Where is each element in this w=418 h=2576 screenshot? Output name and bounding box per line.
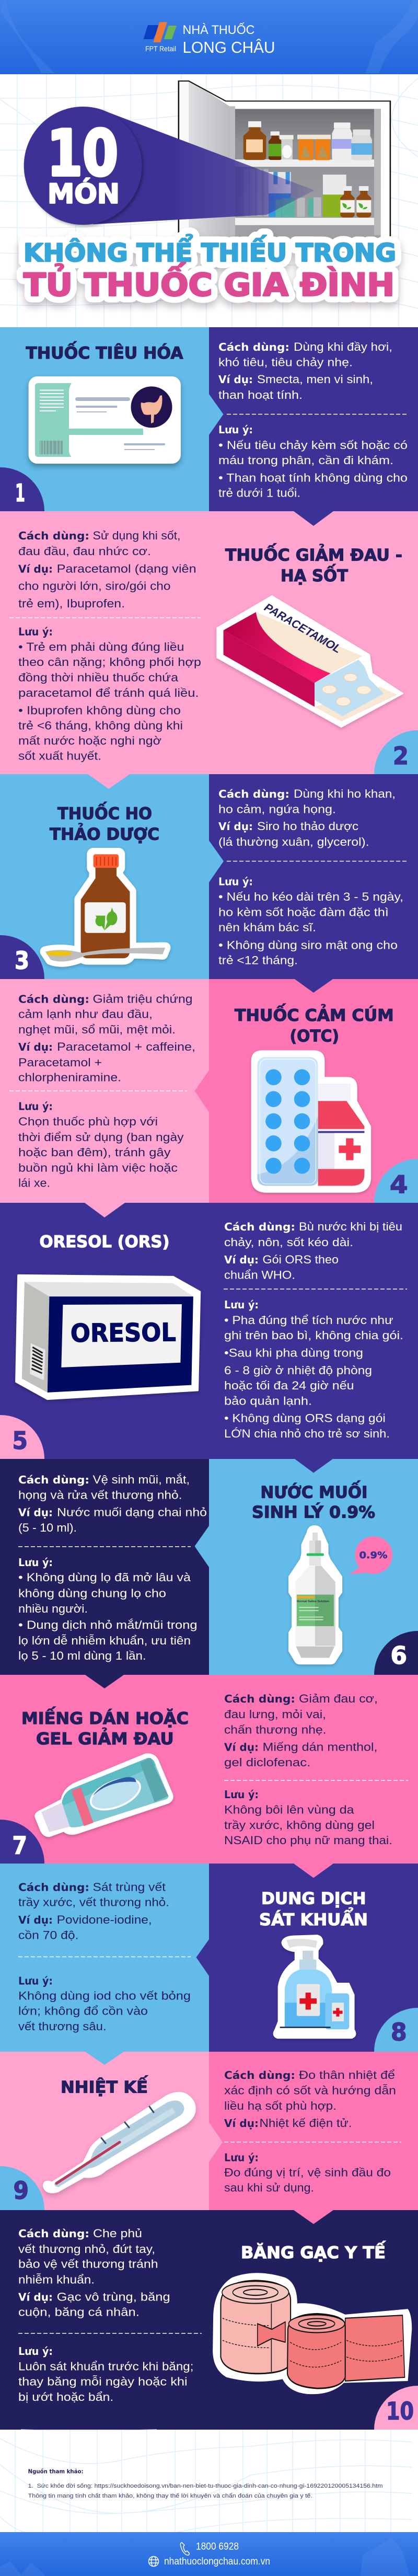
badge: number 2: 2 — [393, 742, 409, 770]
badge: number 4: 4 — [390, 1170, 408, 1199]
text: usage and notes: Ví dụ: — [218, 373, 253, 386]
illustration: oresol box — [16, 1275, 200, 1399]
references text: 1. Sức khỏe đời sống: https://suckhoedoisong.vn/ban-nen-biet-tu-thuoc-gia-dinh-can-co-nhung-gi-169220120005134156.htm — [28, 2483, 383, 2489]
panel: 9 nhiệt kế — [0, 2052, 418, 2210]
text: usage and notes: Cách dùng: — [224, 1693, 295, 1705]
text: usage and notes — [9, 992, 195, 1190]
badge: number 5 — [0, 1415, 44, 1459]
text: usage and notes: Ví dụ: — [224, 1254, 259, 1266]
text: usage and notes: paracetamol để tránh quá liều. — [18, 686, 199, 699]
text: usage and notes: • Không dùng lọ đã mở lâu và — [18, 1571, 191, 1584]
text: usage and notes: chảy, nôn, sốt kéo dài. — [224, 1236, 353, 1249]
text: usage and notes: xác định có sốt và hướng dẫn — [224, 2084, 396, 2097]
text: usage and notes: lái xe. — [18, 1176, 50, 1190]
text: usage and notes: nên khám bác sĩ. — [218, 921, 316, 934]
text: usage and notes: Đo đúng vị trí, vệ sinh đầu đo — [224, 2166, 391, 2179]
illustration: bandage rolls — [213, 2273, 412, 2394]
text: usage and notes — [224, 1220, 407, 1440]
heading: (OTC) — [290, 1027, 339, 1045]
text: usage and notes: nghẹt mũi, sổ mũi, mệt mỏi. — [18, 1023, 176, 1036]
text: usage and notes: Lưu ý: — [18, 1100, 53, 1113]
text: usage and notes: Lưu ý: — [224, 2152, 259, 2164]
panel: 2 thuốc giảm đau hạ sốt — [0, 511, 418, 774]
text: usage and notes: than hoạt tính. — [218, 388, 303, 401]
references text — [28, 2483, 383, 2499]
illustration: antiseptic pump bottles — [273, 1935, 356, 2039]
text: usage and notes: Không dùng iod cho vết bỏng — [18, 1990, 191, 2002]
text: usage and notes: Dùng khi ho khan, — [294, 787, 396, 800]
text: usage and notes: nhiễm khuẩn. — [18, 2273, 95, 2286]
text: usage and notes: Paracetamol + caffeine, — [57, 1040, 195, 1053]
text: usage and notes: gel diclofenac. — [224, 1756, 310, 1769]
panel: 5 oresol: ORESOL — [71, 1318, 176, 1348]
heading: ORESOL (ORS) — [40, 1233, 169, 1251]
text: usage and notes: chlorpheniramine. — [18, 1071, 121, 1084]
text: usage and notes: theo cân nặng; không phối hợp — [18, 656, 201, 669]
panel: 6 nước muối sinh lý — [0, 1459, 418, 1675]
text: usage and notes: chấn thương nhẹ. — [224, 1723, 326, 1736]
references heading: Nguồn tham khảo: — [28, 2468, 84, 2475]
text: usage and notes: cho người lớn, siro/gói cho — [18, 580, 170, 593]
text: usage and notes: • Ibuprofen không dùng cho — [18, 704, 181, 717]
shelves and medicines — [230, 106, 380, 235]
badge: number 9: 9 — [14, 2177, 29, 2205]
text: usage and notes: Che phủ — [93, 2227, 142, 2240]
text: usage and notes: đồng thời nhiều thuốc chứa — [18, 671, 179, 684]
heading: THẢO DƯỢC — [50, 824, 159, 844]
text: usage and notes: mất nước hoặc nghi ngờ — [18, 734, 161, 748]
illustration: gel tube — [36, 1754, 172, 1836]
text: usage and notes: Paracetamol (dạng viên — [57, 562, 196, 575]
text: usage and notes: cảm lạnh như đau đầu, — [18, 1008, 153, 1020]
badge: number 3: 3 — [15, 947, 29, 975]
text: usage and notes: ho kèm sốt hoặc đàm đặc thì — [218, 906, 389, 919]
badge: number 7: 7 — [13, 1832, 27, 1860]
logo wordmark: LONG CHÂU — [183, 38, 275, 56]
badge: number 10 — [374, 2386, 418, 2430]
logo: FPT Retail: FPT Retail — [145, 44, 176, 53]
heading — [225, 544, 402, 585]
text: usage and notes: Cách dùng: — [18, 1474, 89, 1486]
icon: globe — [148, 2556, 159, 2567]
text: usage and notes: Lưu ý: — [218, 423, 253, 436]
heading: NƯỚC MUỐI — [260, 1480, 368, 1502]
text: usage and notes: (lá thường xuân, glycerol). — [218, 835, 369, 848]
text: usage and notes: • Than hoạt tính không dùng cho — [218, 472, 408, 484]
text: usage and notes: liều hạ sốt phù hợp. — [224, 2099, 336, 2112]
text: usage and notes: Giảm triệu chứng — [93, 992, 192, 1006]
text: usage and notes: • Dung dịch nhỏ mắt/mũi trong — [18, 1618, 198, 1631]
panel: 4 thuốc cảm cúm — [0, 979, 418, 1203]
text: usage and notes: không dùng chung lọ cho — [18, 1587, 166, 1600]
text: usage and notes: Miếng dán menthol, — [262, 1741, 377, 1754]
text: usage and notes: buồn ngủ khi làm việc hoặc — [18, 1161, 178, 1174]
text: usage and notes: ghi trên bao bì, không chia gói. — [224, 1329, 403, 1342]
text: usage and notes: thời điểm sử dụng (ban ngày — [18, 1131, 184, 1144]
callout: 0.9% — [350, 1536, 392, 1574]
text: usage and notes — [18, 1881, 191, 2033]
heading: GEL GIẢM ĐAU — [36, 1728, 174, 1749]
text: usage and notes: Smecta, men vi sinh, — [257, 373, 373, 386]
text: usage and notes: Cách dùng: — [218, 341, 289, 353]
logo wordmark: NHÀ THUỐC — [183, 22, 255, 37]
text: usage and notes: Luôn sát khuẩn trước khi băng; — [18, 2360, 193, 2373]
phone number: 1800 6928 — [196, 2542, 239, 2552]
text: usage and notes: Chọn thuốc phù hợp với — [18, 1115, 158, 1128]
badge: number 2 — [374, 730, 418, 774]
text: usage and notes: Bù nước khi bị tiêu — [299, 1220, 402, 1233]
text: usage and notes: Không bôi lên vùng da — [224, 1803, 354, 1816]
text: usage and notes: Nhiệt kế điện tử. — [259, 2117, 352, 2130]
text: usage and notes: Siro ho thảo dược — [257, 820, 358, 833]
badge: number 5: 5 — [13, 1427, 28, 1455]
text: usage and notes: Vệ sinh mũi, mắt, — [93, 1473, 190, 1486]
text: usage and notes: cồn 70 độ. — [18, 1928, 78, 1941]
text: usage and notes: Cách dùng: — [224, 2069, 295, 2082]
illustration: saline bottle — [288, 1525, 342, 1664]
panel: 3 thuốc ho thảo dược — [0, 774, 418, 979]
logo wordmark — [183, 22, 275, 56]
panel: 1 thuốc tiêu hóa — [0, 327, 418, 511]
text: usage and notes: lọ lớn dễ nhiễm khuẩn, ưu tiên — [18, 1634, 191, 1647]
hero background grid — [0, 74, 418, 327]
panel: 6 nước muối sinh lý: Normal Saline Solution — [297, 1600, 330, 1603]
text: usage and notes: vết thương nhỏ, đứt tay, — [18, 2242, 155, 2256]
badge: number 1 — [0, 467, 44, 511]
text: usage and notes: •Sau khi pha dùng trong — [224, 1347, 363, 1359]
main title: TỦ THUỐC GIA ĐÌNH — [24, 262, 394, 303]
panel: 10 băng gạc y tế — [0, 2210, 418, 2430]
badge: number 6: 6 — [391, 1641, 407, 1670]
text: usage and notes: máu trong phân, cần đi khám. — [218, 454, 393, 467]
text: usage and notes: NSAID cho phụ nữ mang thai. — [224, 1834, 392, 1847]
hero: medicine cabinet — [179, 80, 390, 243]
text: usage and notes: ho cảm, ngứa họng. — [218, 803, 336, 816]
text: usage and notes: Sát trùng vết — [93, 1881, 166, 1893]
text: usage and notes: Cách dùng: — [18, 530, 89, 542]
text: usage and notes: bảo quản lạnh. — [224, 1394, 312, 1407]
illustration: thermometer — [45, 2094, 194, 2191]
heading: HẠ SỐT — [281, 564, 348, 585]
heading — [259, 1889, 368, 1929]
text: usage and notes: chuẩn WHO. — [224, 1268, 295, 1282]
text: usage and notes: Ví dụ: — [18, 1041, 53, 1053]
badge: number 7 — [0, 1820, 44, 1864]
text: usage and notes: Ví dụ: — [18, 562, 53, 575]
text: usage and notes: trầy xước, vết thương nhỏ. — [18, 1895, 169, 1909]
text: usage and notes — [18, 1473, 207, 1662]
badge: number 1: 1 — [15, 479, 25, 507]
text: usage and notes: Đo thân nhiệt để — [299, 2068, 395, 2082]
panel: 8 dung dịch sát khuẩn — [0, 1864, 418, 2052]
text: usage and notes: Nước muối dạng chai nhỏ — [57, 1506, 207, 1519]
main title: TỦ THUỐC GIA ĐÌNH — [24, 262, 394, 303]
text: usage and notes: hoặc ban đêm), tránh gây — [18, 1146, 170, 1159]
heading: THUỐC CẢM CÚM — [235, 1004, 394, 1025]
text: usage and notes: Lưu ý: — [18, 625, 53, 638]
heading: NHIỆT KẾ — [61, 2076, 148, 2097]
text: usage and notes: • Nếu ho kéo dài trên 3 - 5 ngày, — [218, 890, 403, 903]
text: usage and notes: Lưu ý: — [18, 1975, 53, 1987]
text: usage and notes: trầy xước, không dùng gel — [224, 1819, 375, 1832]
text: usage and notes — [9, 529, 201, 763]
text: usage and notes: • Không dùng ORS dạng gói — [224, 1411, 386, 1425]
hero: number badge 10 món: 10 — [47, 118, 118, 190]
illustration: herbal syrup and spoon — [45, 854, 165, 962]
text: usage and notes: hoặc tối đa 24 giờ nếu — [224, 1379, 354, 1392]
heading — [252, 1480, 375, 1522]
text: usage and notes: Giảm đau cơ, — [299, 1692, 378, 1705]
text: usage and notes: trẻ <6 tháng, không dùng khi — [18, 719, 183, 732]
main title — [24, 235, 396, 303]
text: usage and notes: Cách dùng: — [18, 2227, 89, 2240]
badge: number 4 — [374, 1159, 418, 1203]
heading: SÁT KHUẨN — [259, 1908, 368, 1929]
text: usage and notes: Ví dụ: — [18, 1506, 53, 1519]
text: usage and notes: trẻ em), Ibuprofen. — [18, 597, 125, 610]
text: usage and notes — [218, 787, 408, 967]
badge: number 9 — [0, 2166, 44, 2210]
text: usage and notes — [224, 1692, 408, 1847]
text: usage and notes: Cách dùng: — [18, 1881, 89, 1893]
text: usage and notes: (5 - 10 ml). — [18, 1521, 77, 1534]
text: usage and notes: Cách dùng: — [18, 993, 89, 1006]
text: usage and notes: Lưu ý: — [18, 2345, 53, 2358]
text: usage and notes — [18, 2227, 202, 2404]
text: usage and notes: sốt xuất huyết. — [18, 750, 101, 763]
text: usage and notes: Povidone-iodine, — [57, 1913, 152, 1926]
text: usage and notes: • Pha đúng thể tích nước như — [224, 1314, 393, 1327]
illustration: paracetamol box — [217, 596, 402, 727]
text: usage and notes: Ví dụ: — [224, 2117, 259, 2130]
text: usage and notes: Cách dùng: — [224, 1221, 295, 1233]
text: usage and notes: trẻ dưới 1 tuổi. — [218, 486, 300, 500]
text: usage and notes: khó tiêu, tiêu chảy nhẹ. — [218, 356, 353, 369]
text: usage and notes: Gạc vô trùng, băng — [57, 2291, 170, 2304]
icon: phone — [180, 2543, 189, 2555]
heading: MIẾNG DÁN HOẶC — [21, 1707, 189, 1728]
text: usage and notes: Ví dụ: — [218, 820, 253, 833]
text: usage and notes: Lưu ý: — [218, 875, 253, 888]
heading: DUNG DỊCH — [261, 1889, 366, 1908]
badge: number 8 — [374, 2008, 418, 2052]
badge: number 8: 8 — [391, 2018, 407, 2046]
text: usage and notes — [224, 2068, 401, 2194]
text: usage and notes: Dùng khi đầy hơi, — [294, 340, 392, 353]
text: usage and notes: • Không dùng siro mật ong cho — [218, 938, 398, 951]
hero: light beam — [93, 110, 315, 224]
text: usage and notes: vết thương sâu. — [18, 2020, 107, 2033]
text: usage and notes: lớn; không đổ cồn vào — [18, 2005, 148, 2018]
main title: KHÔNG THỂ THIẾU TRONG — [24, 235, 396, 268]
badge: number 6 — [374, 1631, 418, 1675]
header banner — [0, 0, 418, 74]
text: usage and notes: Ví dụ: — [18, 2291, 53, 2304]
text: usage and notes: đau đầu, đau nhức cơ. — [18, 545, 151, 558]
text: usage and notes: cuộn, băng cá nhân. — [18, 2306, 140, 2319]
heading: THUỐC HO — [57, 802, 152, 823]
text: usage and notes: Lưu ý: — [224, 1788, 259, 1801]
heading: THUỐC TIÊU HÓA — [26, 341, 183, 363]
text: usage and notes: • Nếu tiêu chảy kèm sốt hoặc có — [218, 439, 408, 452]
text: usage and notes: Gói ORS theo — [262, 1253, 339, 1266]
references section — [0, 2430, 418, 2533]
heading: SINH LÝ 0.9% — [252, 1503, 375, 1522]
heading: THUỐC GIẢM ĐAU - — [225, 544, 402, 565]
text: usage and notes: lọ 5 - 10 ml dùng 1 lần. — [18, 1649, 146, 1662]
text: usage and notes: thay băng mỗi ngày hoặc khi — [18, 2375, 188, 2388]
text: usage and notes: đau lưng, mỏi vai, — [224, 1708, 326, 1721]
main title: KHÔNG THỂ THIẾU TRONG — [24, 235, 396, 268]
logo: FPT Retail — [143, 22, 177, 53]
text: usage and notes — [218, 340, 408, 500]
heading — [50, 802, 159, 844]
text: usage and notes: Lưu ý: — [224, 1298, 259, 1311]
text: usage and notes: Cách dùng: — [218, 788, 289, 800]
text: usage and notes: bảo vệ vết thương tránh — [18, 2258, 158, 2271]
text: usage and notes: nhiều người. — [18, 1602, 88, 1615]
text: usage and notes: sau khi sử dụng. — [224, 2181, 314, 2194]
text: usage and notes: LỚN chia nhỏ cho trẻ sơ sinh. — [224, 1427, 390, 1440]
text: usage and notes: Paracetamol + — [18, 1056, 102, 1069]
text: usage and notes: Lưu ý: — [18, 1556, 53, 1569]
hero: number badge 10 món — [24, 107, 142, 225]
hero: number badge 10 món: MÓN — [48, 178, 120, 210]
illustration: medicine box with stomach — [29, 376, 181, 464]
illustration: blister pack and bottle — [251, 1050, 371, 1193]
website: nhathuoclongchau.com.vn — [164, 2556, 270, 2567]
panel: 2 thuốc giảm đau hạ sốt: PARACETAMOL — [262, 601, 343, 656]
text: usage and notes: họng và rửa vết thương nhỏ. — [18, 1489, 182, 1501]
heading: BĂNG GẠC Y TẾ — [241, 2241, 386, 2262]
heading — [21, 1707, 189, 1749]
badge: number 3 — [0, 935, 44, 979]
text: usage and notes: • Trẻ em phải dùng đúng liều — [18, 640, 184, 653]
text: usage and notes: Sử dụng khi sốt, — [93, 529, 181, 542]
panel: 5 oresol — [0, 1203, 418, 1459]
callout: 0.9%: 0.9% — [359, 1550, 388, 1561]
text: usage and notes: bị ướt hoặc bẩn. — [18, 2390, 113, 2404]
heading — [235, 1004, 394, 1045]
text: usage and notes: Ví dụ: — [18, 1914, 53, 1926]
references text: Thông tin mang tính chất tham khảo, không thay thế lời khuyên và chẩn đoán của chuyên gia y tế. — [28, 2493, 312, 2499]
panel: 7 miếng dán hoặc gel — [0, 1675, 418, 1864]
footer banner — [0, 2532, 418, 2576]
text: usage and notes: Ví dụ: — [224, 1741, 259, 1754]
text: usage and notes: trẻ <12 tháng. — [218, 953, 298, 967]
text: usage and notes: 6 - 8 giờ ở nhiệt độ phòng — [224, 1364, 372, 1377]
